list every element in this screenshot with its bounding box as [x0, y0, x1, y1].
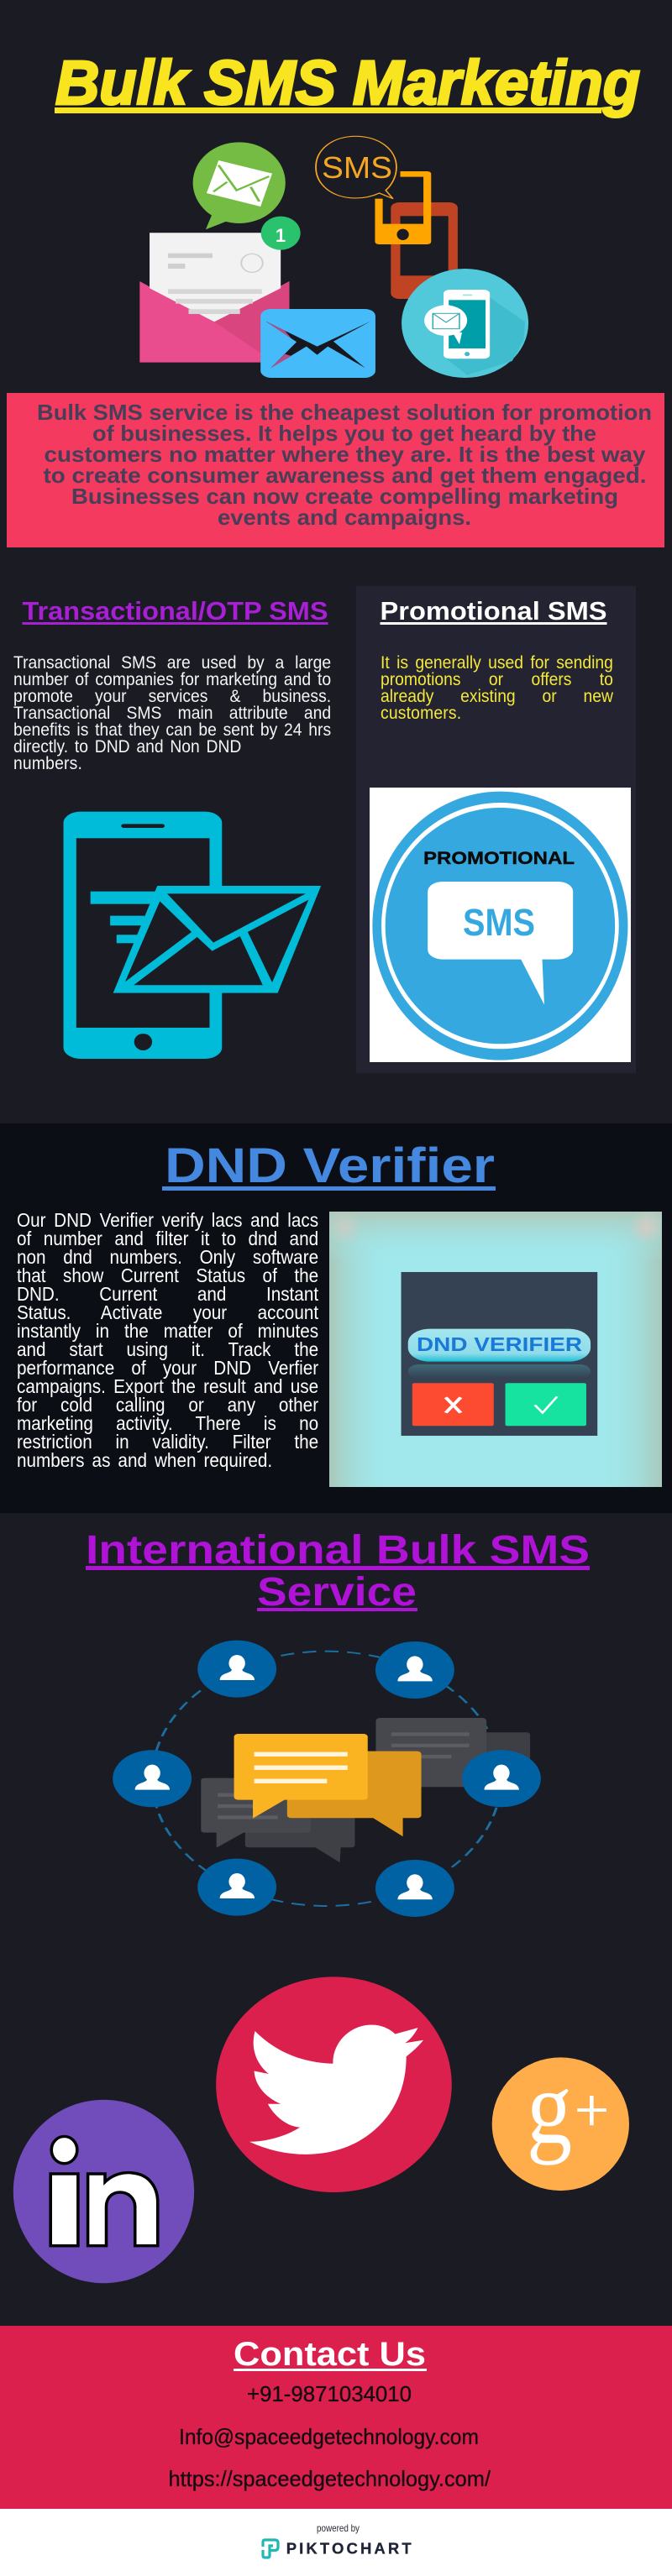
intro text: of businesses. It helps you to get heard by the [92, 421, 596, 446]
text: DND Verifier description: that show Current Status of the [17, 1264, 318, 1286]
Piktochart logo mark [263, 2540, 278, 2558]
heading: Transactional/OTP SMS: Transactional/OTP SMS [22, 596, 328, 626]
intro text: events and campaigns. [218, 505, 471, 530]
icon: Google Plus: g [527, 2050, 572, 2166]
intro text: to create consumer awareness and get them engaged. [44, 463, 647, 488]
heading: International Bulk SMS Service [86, 1528, 590, 1615]
panel: Promotional SMS [356, 586, 636, 1073]
image: promotional SMS badge: PROMOTIONAL [423, 849, 575, 868]
icon: pink envelope with letter [139, 217, 301, 363]
text: Transactional SMS description: Transactional SMS are used by a large [13, 653, 331, 673]
text: Promotional SMS description: promotions or offers to [380, 670, 612, 689]
badge number: 1 [276, 225, 286, 246]
text: Transactional SMS description: promote your services & business. [13, 687, 331, 706]
icon: green mail bubble [193, 142, 286, 229]
hero illustration: messaging icons [139, 136, 528, 378]
icon: SMS speech bubble: SMS [322, 150, 392, 185]
text: Transactional SMS description: benefits is that they can be sent by 24 hrs [13, 720, 331, 740]
panel: intro banner [7, 393, 664, 547]
heading: Contact Us: Contact Us [234, 2336, 426, 2373]
text: DND Verifier description: DND. Current and Instant [17, 1283, 318, 1305]
icon: blue envelope [260, 309, 375, 378]
text: DND Verifier description: of number and filter it to dnd and [17, 1228, 318, 1249]
text: Transactional SMS description [13, 653, 331, 773]
text: DND Verifier description: and start using it. Track the [17, 1338, 318, 1360]
chat bubbles: orange [234, 1734, 422, 1836]
image: promotional SMS badge [370, 788, 631, 1062]
text: DND Verifier description: Our DND Verifier verify lacs and lacs [17, 1209, 318, 1231]
icon: orange and red phones [375, 171, 458, 299]
panel: contact [0, 2326, 672, 2509]
text: Transactional SMS description: directly. to DND and Non DND [13, 737, 241, 757]
text: DND Verifier description: marketing activity. There is no [17, 1412, 318, 1434]
text: Transactional SMS description: numbers. [13, 754, 82, 773]
user nodes [113, 1641, 541, 1917]
image: promotional SMS badge: SMS [463, 901, 535, 944]
illustration: chat network [113, 1641, 541, 1917]
intro text [37, 400, 652, 530]
text: DND Verifier description: campaigns. Export the result and use [17, 1375, 318, 1397]
title: Bulk SMS Marketing [55, 48, 640, 118]
text: Promotional SMS description: customers. [380, 704, 461, 723]
heading: Promotional SMS: Promotional SMS [380, 596, 606, 626]
icon: SMS speech bubble [316, 136, 396, 199]
text: DND Verifier description [17, 1209, 318, 1471]
image: DND verifier app card: DND VERIFIER [417, 1333, 582, 1355]
icon: cyan phone with envelope [64, 812, 321, 1059]
panel: DND section background [0, 1123, 672, 1513]
intro text: customers no matter where they are. It is the best way [44, 442, 646, 467]
text: Promotional SMS description: already existing or new [380, 687, 612, 706]
Piktochart wordmark: PIKTOCHART [286, 2540, 412, 2558]
text: Transactional SMS description: number of companies for marketing and to [13, 670, 331, 689]
image: DND verifier app card [319, 1208, 672, 1487]
icon: Twitter [216, 1977, 452, 2192]
powered by label: powered by [317, 2522, 360, 2534]
intro text: Businesses can now create compelling marketing [71, 484, 618, 509]
icon: LinkedIn [13, 2100, 194, 2283]
icon: teal circle with phone [402, 269, 528, 378]
footer [0, 2509, 672, 2576]
text: DND Verifier description: instantly in the matter of minutes [17, 1320, 318, 1342]
chat bubbles: grey [201, 1718, 530, 1862]
heading: International Bulk SMS Service: International Bulk SMS [86, 1528, 590, 1573]
text: DND Verifier description: for cold calling or any other [17, 1394, 318, 1416]
intro text: Bulk SMS service is the cheapest solution for promotion [37, 400, 652, 425]
text: Promotional SMS description: It is generally used for sending [380, 653, 612, 673]
heading: DND Verifier: DND Verifier [165, 1139, 495, 1193]
icon: Google Plus [492, 2050, 629, 2191]
text: DND Verifier description: Status. Activate your account [17, 1301, 318, 1323]
text: DND Verifier description: numbers as and when required. [17, 1449, 272, 1471]
contact website: https://spaceedgetechnology.com/ [168, 2466, 491, 2491]
text: DND Verifier description: non dnd numbers. Only software [17, 1246, 318, 1268]
text: Transactional SMS description: Transactional SMS main attribute and [13, 704, 331, 723]
contact phone: +91-9871034010 [247, 2381, 412, 2406]
heading: International Bulk SMS Service: Service [257, 1570, 417, 1615]
text: DND Verifier description: performance of your DND Verfier [17, 1357, 318, 1379]
text: Promotional SMS description [380, 653, 613, 723]
text: DND Verifier description: restriction in validity. Filter the [17, 1431, 318, 1453]
contact email: Info@spaceedgetechnology.com [179, 2424, 479, 2449]
